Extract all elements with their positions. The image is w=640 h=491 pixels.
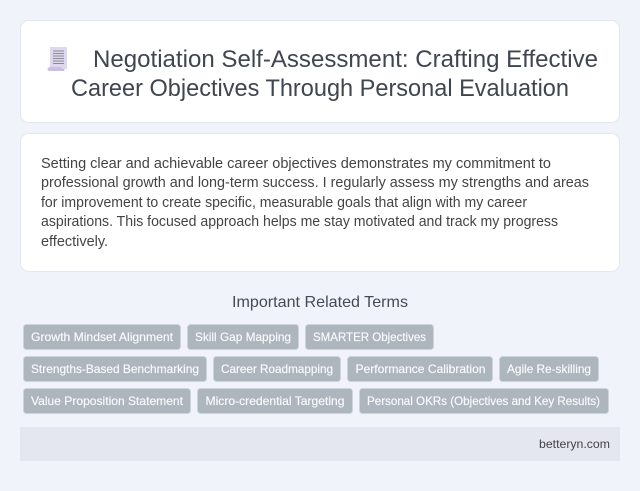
tag: Strengths-Based Benchmarking [31, 362, 199, 376]
panel: introduction text [20, 134, 620, 272]
panel: introduction text: Setting clear and achievable career objectives demonstrates my commitment to [41, 156, 551, 172]
panel: introduction text: aspirations. This focused approach helps me stay motivated and track my progress [41, 214, 558, 230]
tag: Agile Re-skilling [507, 362, 591, 376]
title: Career Objectives Through Personal Evaluation [71, 75, 569, 102]
tag: Personal OKRs (Objectives and Key Results) [367, 394, 600, 408]
tag [24, 388, 190, 414]
tag [198, 388, 352, 414]
panel: introduction text: for improvement to create specific, measurable goals that align with my career [41, 195, 527, 211]
footer [20, 427, 620, 461]
tag: Career Roadmapping [221, 362, 333, 376]
tag [306, 324, 434, 350]
title [71, 46, 598, 102]
tag: Performance Calibration [356, 362, 486, 376]
tag [24, 356, 206, 382]
tag: SMARTER Objectives [313, 330, 426, 344]
tag [500, 356, 598, 382]
panel: introduction text: effectively. [41, 234, 108, 250]
tag [24, 324, 180, 350]
tag [214, 356, 340, 382]
tag [188, 324, 298, 350]
heading: related terms: Important Related Terms [232, 294, 408, 311]
tag [360, 388, 608, 414]
panel: title card [20, 20, 620, 122]
tag: Micro-credential Targeting [206, 394, 344, 408]
tag: Skill Gap Mapping [195, 330, 291, 344]
tag: Growth Mindset Alignment [31, 330, 174, 344]
title: Negotiation Self-Assessment: Crafting Effective [93, 46, 598, 73]
footer: betteryn.com [539, 437, 610, 451]
tag list [24, 324, 608, 414]
tag: Value Proposition Statement [31, 394, 184, 408]
icon: document scroll [48, 47, 67, 71]
tag [348, 356, 492, 382]
panel: introduction text: professional growth and long-term success. I regularly assess my strengths and areas [41, 175, 589, 191]
